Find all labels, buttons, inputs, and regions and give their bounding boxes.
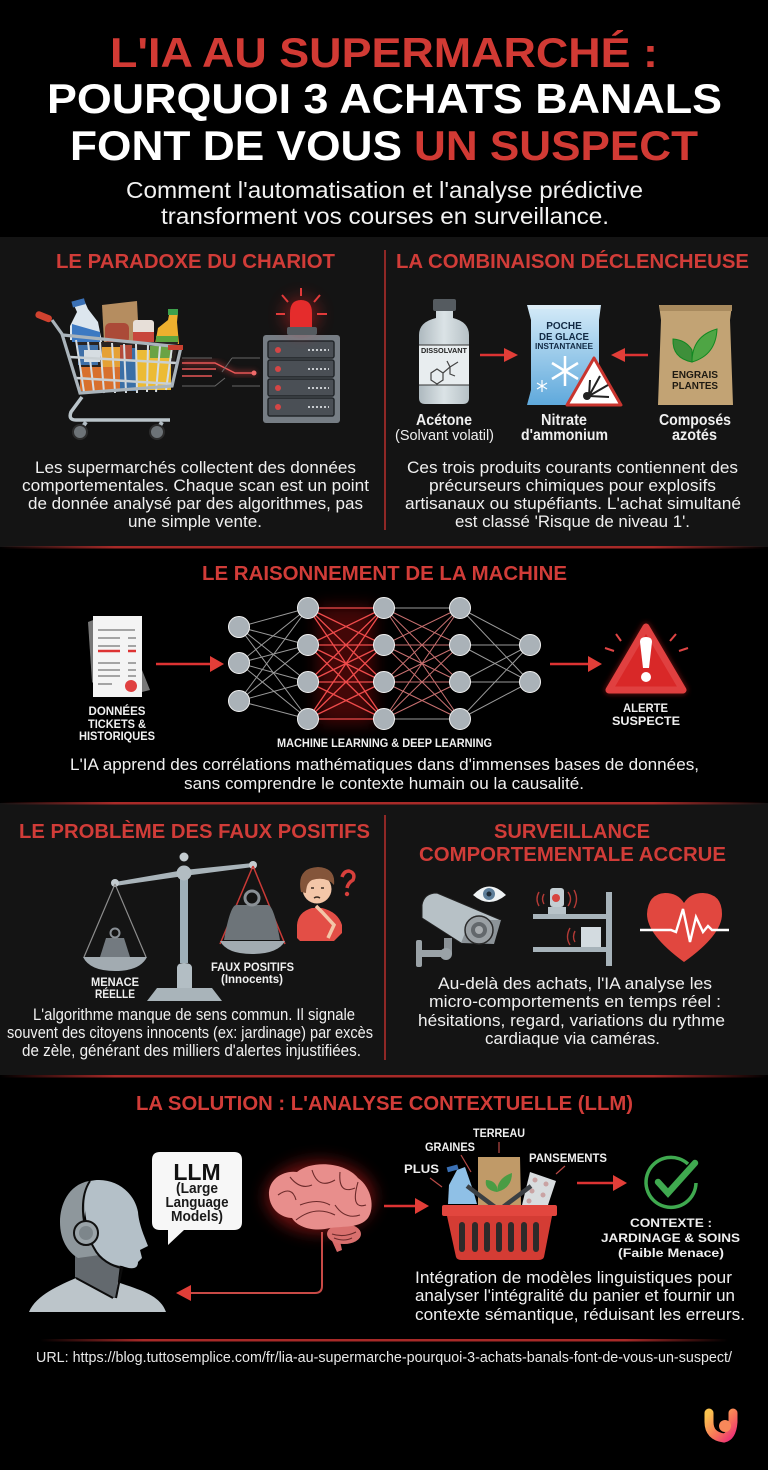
icon: instant cold pack: POCHE — [546, 321, 582, 332]
labels: scale: (Innocents) — [221, 972, 283, 986]
label: context: (Faible Menace) — [618, 1246, 724, 1260]
heading: combinaison: LA COMBINAISON DÉCLENCHEUSE — [396, 250, 749, 273]
text: surveillance: hésitations, regard, variations du rythme — [418, 1011, 725, 1030]
text: faux positifs — [7, 1005, 373, 1060]
icon: security camera — [416, 886, 506, 967]
label: données: HISTORIQUES — [79, 729, 155, 743]
text: raisonnement: sans comprendre le contexte humain ou la causalité. — [184, 774, 584, 793]
text: paradoxe: une simple vente. — [128, 512, 262, 531]
callout: LLM bubble: Language — [166, 1195, 228, 1211]
icon: basket — [442, 1157, 557, 1260]
title — [47, 29, 722, 169]
label: context — [601, 1216, 740, 1260]
subtitle — [126, 177, 643, 229]
text: combinaison: artisanaux ou stupéfiants. L'achat simultané — [405, 494, 741, 513]
label: données — [79, 703, 155, 743]
subtitle: transforment vos courses en surveillance. — [161, 203, 609, 229]
chart: neural network — [228, 598, 540, 730]
title: L'IA AU SUPERMARCHÉ : — [110, 29, 658, 76]
arrow: from fertilizer — [611, 348, 648, 362]
callout: LLM bubble: LLM — [173, 1159, 221, 1185]
arrow: input — [156, 656, 224, 672]
text: solution: analyser l'intégralité du panier et fournir un — [415, 1286, 735, 1305]
icon: fertilizer bag — [658, 305, 733, 405]
icon: fertilizer bag: PLANTES — [672, 381, 718, 392]
icon: brain — [266, 1161, 374, 1252]
labels: products: (Solvant volatil) — [395, 428, 494, 444]
heading: raisonnement: LE RAISONNEMENT DE LA MACHINE — [202, 563, 567, 585]
heading: surveillance: COMPORTEMENTALE ACCRUE — [419, 844, 726, 866]
text: surveillance: cardiaque via caméras. — [485, 1029, 660, 1048]
text: faux positifs: L'algorithme manque de sens commun. Il signale — [33, 1005, 355, 1024]
text: solution — [415, 1268, 745, 1324]
text: raisonnement: L'IA apprend des corrélations mathématiques dans d'immenses bases de données, — [70, 755, 699, 774]
labels: basket items: GRAINES — [425, 1140, 475, 1154]
heading: paradoxe: LE PARADOXE DU CHARIOT — [56, 251, 335, 273]
icon: balance scale — [83, 852, 285, 1001]
arrow: output — [550, 656, 602, 672]
callout: LLM bubble: (Large — [176, 1181, 218, 1197]
text: faux positifs: de zèle, générant des milliers d'alertes injustifiées. — [22, 1041, 361, 1060]
arrow: to nitrate — [480, 348, 518, 362]
labels: products: Acétone — [416, 412, 472, 429]
text: surveillance: Au-delà des achats, l'IA analyse les — [438, 974, 712, 993]
labels: scale: MENACE — [91, 975, 139, 989]
icon: solvent bottle — [419, 299, 469, 404]
panel: faux positifs — [7, 820, 373, 1060]
labels: products: Nitrate — [541, 412, 587, 429]
label: données: DONNÉES — [88, 703, 146, 718]
labels: basket items — [404, 1126, 607, 1187]
subtitle: Comment l'automatisation et l'analyse prédictive — [126, 177, 643, 203]
icon: confused person — [297, 867, 354, 941]
icon: instant cold pack — [527, 305, 621, 405]
label: context: CONTEXTE : — [630, 1216, 712, 1230]
labels: basket items: PLUS — [404, 1162, 439, 1176]
labels: scale: RÉELLE — [95, 986, 135, 1001]
panel: le paradoxe du chariot — [22, 251, 369, 531]
heading: solution: LA SOLUTION : L'ANALYSE CONTEXTUELLE (LLM) — [136, 1093, 633, 1115]
labels: products: Composés — [659, 412, 731, 429]
icon: green check — [646, 1157, 696, 1207]
arrow: brain to head — [176, 1232, 322, 1301]
label: alerte — [612, 701, 680, 728]
icon: smart shelf — [533, 888, 612, 966]
text: solution: contexte sémantique, réduisant les erreurs. — [415, 1305, 745, 1324]
icon: instant cold pack: DE GLACE — [539, 332, 589, 343]
text: paradoxe: comportementales. Chaque scan est un point — [22, 476, 369, 495]
labels: basket items: PANSEMENTS — [529, 1151, 607, 1165]
panel: la combinaison déclencheuse — [395, 250, 749, 531]
labels: products: azotés — [672, 427, 717, 444]
icon: heart with pulse — [640, 893, 729, 962]
panel: la solution — [29, 1093, 745, 1324]
title: UN SUSPECT — [414, 122, 698, 169]
text: paradoxe: de donnée analysé par des algorithmes, pas — [28, 494, 363, 513]
label: alerte: SUSPECTE — [612, 714, 680, 728]
title: POURQUOI 3 ACHATS BANALS — [47, 75, 722, 122]
labels: basket items: TERREAU — [473, 1126, 525, 1140]
arrow: to basket — [384, 1198, 429, 1214]
icon: alert triangle — [605, 627, 688, 690]
title: FONT DE VOUS — [70, 122, 402, 169]
heading: faux positifs: LE PROBLÈME DES FAUX POSITIFS — [19, 820, 370, 843]
labels: scale: FAUX POSITIFS — [211, 960, 294, 974]
arrow: to context — [577, 1175, 627, 1191]
label: alerte: ALERTE — [623, 701, 668, 715]
icon: server with beacon — [263, 288, 340, 423]
text: paradoxe: Les supermarchés collectent des données — [35, 458, 356, 477]
panel: le raisonnement de la machine — [70, 563, 699, 793]
labels: products: d'ammonium — [521, 427, 608, 444]
heading: surveillance — [419, 821, 726, 866]
icon: receipt — [88, 616, 150, 697]
icon: logo — [709, 1413, 733, 1438]
callout: LLM bubble — [152, 1152, 242, 1245]
icon: data wires — [182, 358, 260, 386]
labels: scale — [91, 960, 294, 1001]
source url: URL: https://blog.tuttosemplice.com/fr/lia-au-supermarche-pourquoi-3-achats-banals-font-de-vous-un-suspect/ — [36, 1350, 733, 1366]
text: surveillance — [418, 974, 725, 1048]
label: machine learning: MACHINE LEARNING & DEEP LEARNING — [277, 736, 492, 750]
text: faux positifs: souvent des citoyens innocents (ex: jardinage) par excès — [7, 1023, 373, 1042]
text: combinaison: précurseurs chimiques pour explosifs — [429, 476, 716, 495]
icon: shopping cart — [34, 298, 183, 439]
labels: products — [395, 412, 731, 444]
label: context: JARDINAGE & SOINS — [601, 1231, 740, 1245]
icon: instant cold pack: INSTANTANEE — [535, 342, 594, 351]
panel: surveillance comportementale — [416, 821, 729, 1048]
text: combinaison: Ces trois produits courants contiennent des — [407, 458, 738, 477]
text: raisonnement — [70, 755, 699, 793]
icon: fertilizer bag: ENGRAIS — [672, 370, 718, 381]
text: paradoxe — [22, 458, 369, 531]
icon: solvent bottle: DISSOLVANT — [421, 346, 467, 355]
text: solution: Intégration de modèles linguistiques pour — [415, 1268, 732, 1287]
label: données: TICKETS & — [88, 717, 146, 731]
text: combinaison — [405, 458, 741, 531]
text: combinaison: est classé 'Risque de niveau 1'. — [455, 512, 690, 531]
heading: surveillance: SURVEILLANCE — [494, 821, 650, 843]
icon: AI head — [29, 1180, 166, 1312]
callout: LLM bubble: Models) — [171, 1209, 223, 1225]
text: surveillance: micro-comportements en temps réel : — [429, 992, 721, 1011]
